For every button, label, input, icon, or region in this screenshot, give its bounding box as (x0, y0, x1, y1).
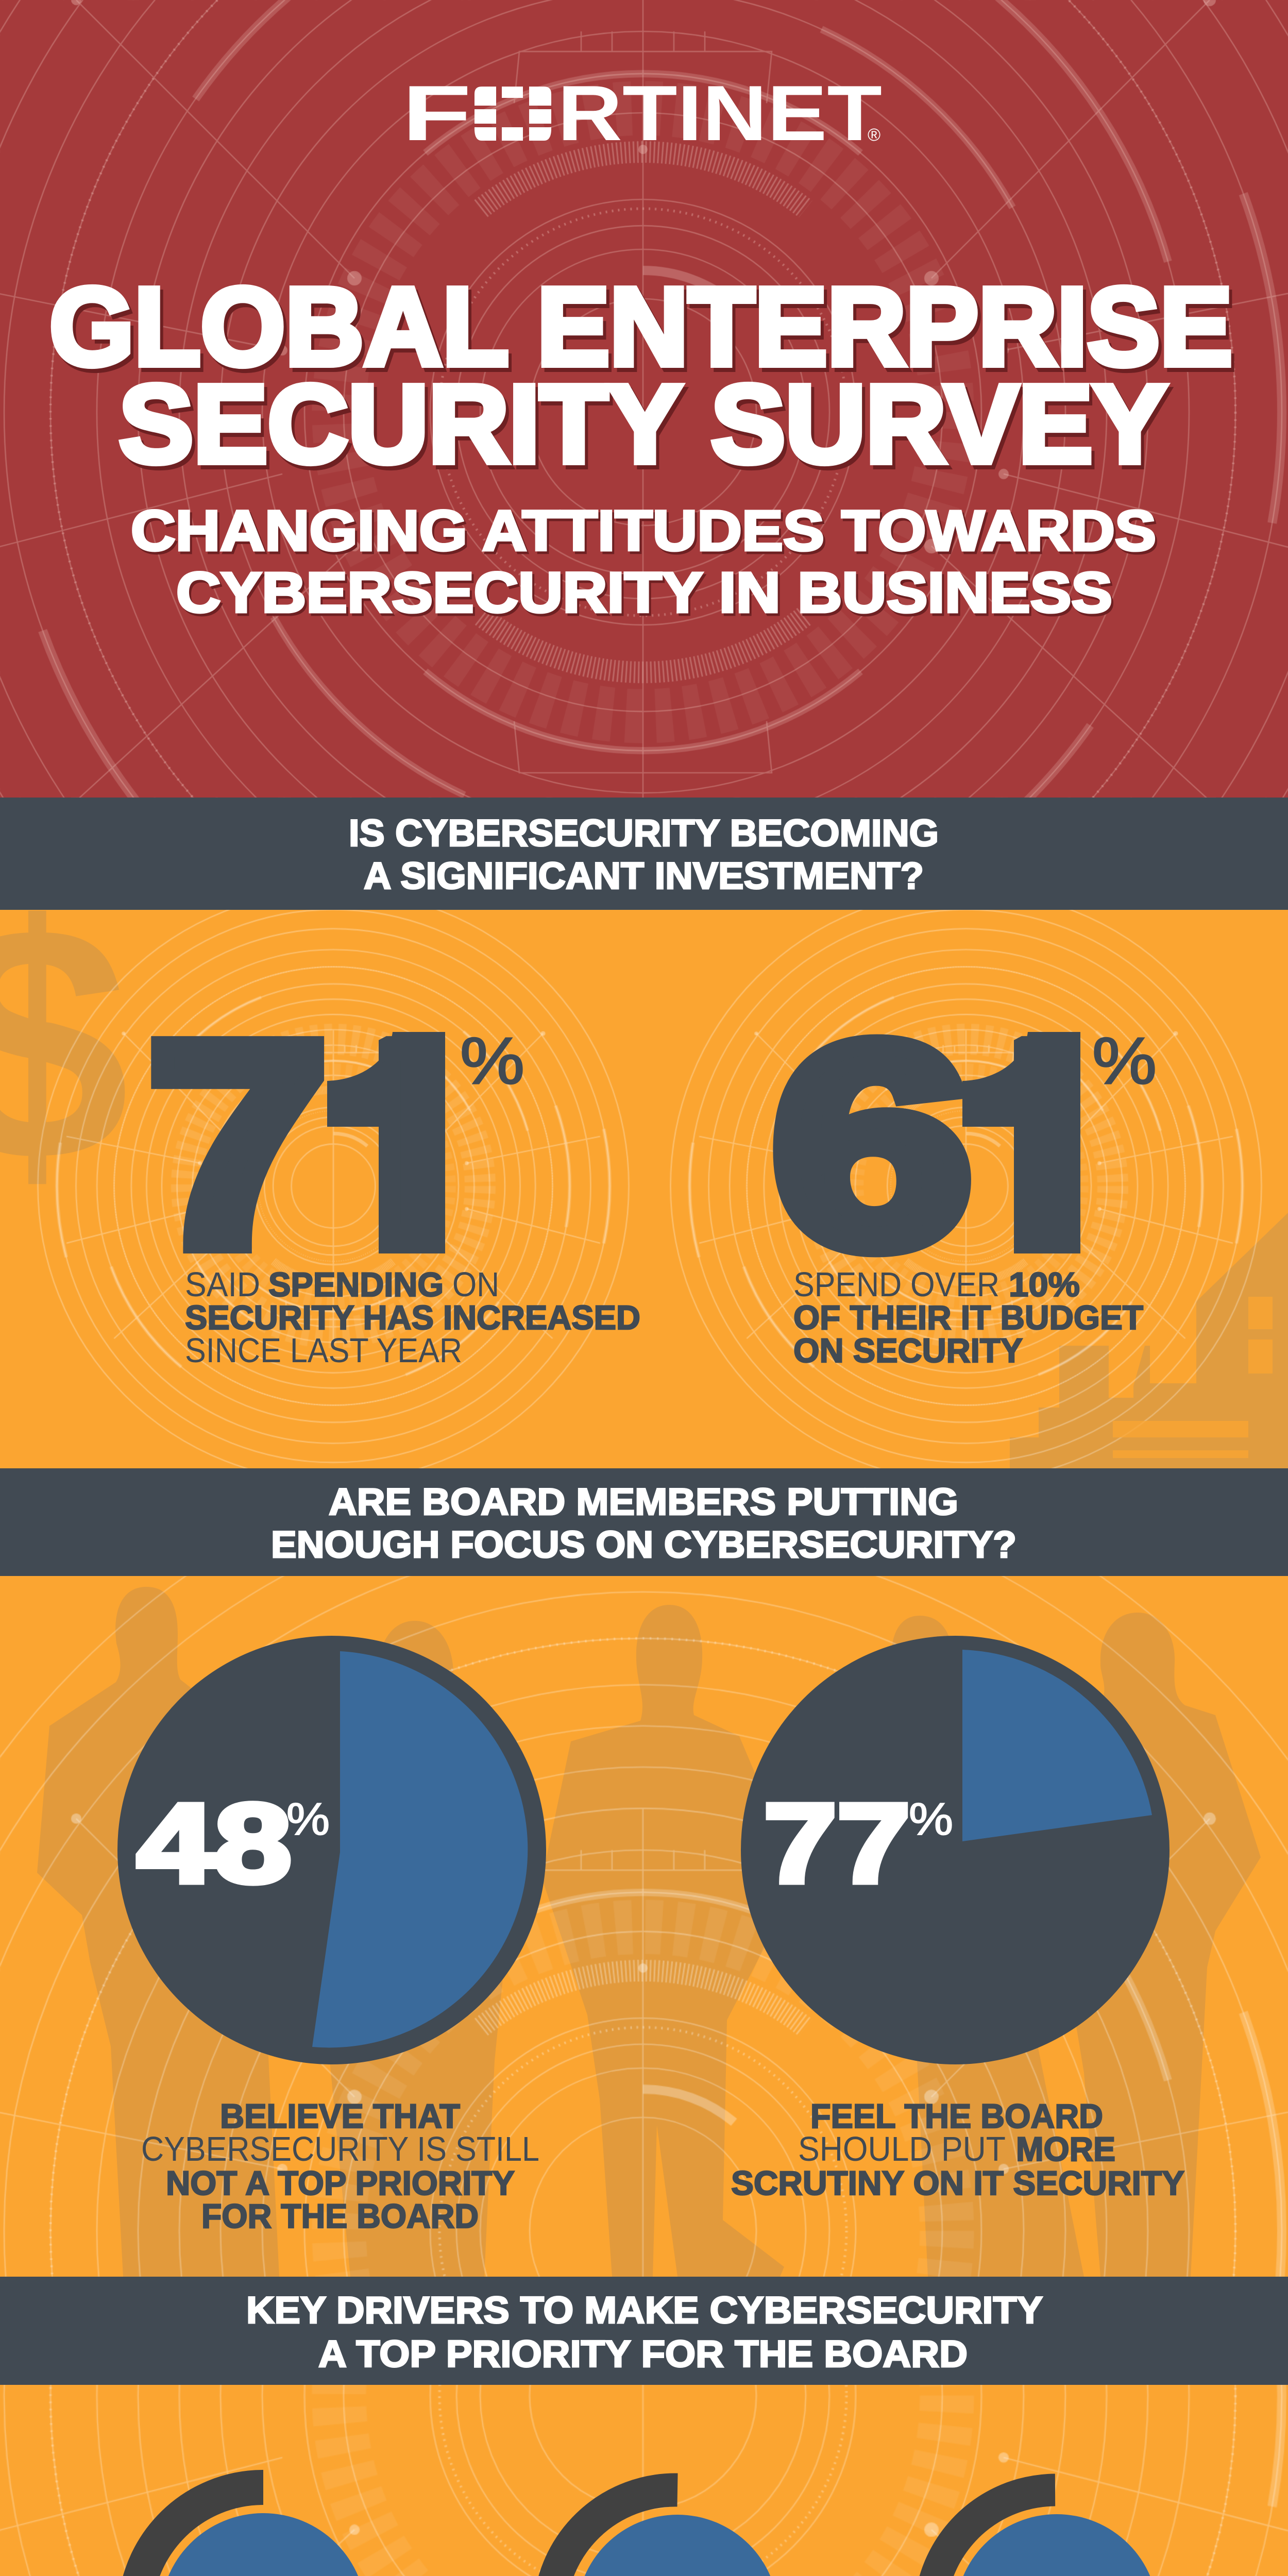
text: spending caption: ON (452, 1265, 499, 1304)
subtitle: CHANGING ATTITUDES TOWARDS (133, 502, 1158, 565)
heading band: key drivers: KEY DRIVERS TO MAKE CYBERSECURITY (246, 2290, 1043, 2331)
heading band: key drivers: A TOP PRIORITY FOR THE BOARD (318, 2333, 968, 2375)
stat: 71 percent: 1 (304, 985, 502, 1304)
heading band: investment: IS CYBERSECURITY BECOMING (349, 812, 939, 854)
text: budget caption: 10% (1009, 1265, 1080, 1303)
heading band: investment: A SIGNIFICANT INVESTMENT? (364, 855, 924, 897)
logo: Fortinet: RTINET (557, 70, 882, 157)
logo: Fortinet: ® (868, 125, 880, 145)
stat: 71 percent (151, 1032, 523, 1253)
pie chart: 77 percent (741, 1636, 1170, 2064)
logo: Fortinet (402, 70, 882, 157)
text: spending caption: SECURITY HAS INCREASED (185, 1298, 640, 1336)
pie chart: 48 percent (117, 1636, 546, 2064)
logo: Fortinet: F (402, 70, 471, 157)
heading band: board (0, 1468, 1288, 1576)
subtitle (131, 499, 1158, 627)
heading band: board: ARE BOARD MEMBERS PUTTING (329, 1481, 958, 1523)
pattern: hud rings (0, 2385, 1288, 2576)
ring chart: 77 percent cloud migration (135, 2487, 392, 2576)
pattern: hud rings (0, 910, 1288, 1468)
stat: 61 percent: 6 (773, 986, 971, 1305)
text: priority caption: CYBERSECURITY IS STILL (141, 2130, 539, 2168)
pie chart: 77 percent: 77 (764, 1781, 910, 1906)
subtitle: CHANGING ATTITUDES TOWARDS (131, 499, 1156, 563)
text: budget caption: OF THEIR IT BUDGET (793, 1298, 1143, 1336)
text: scrutiny caption: MORE (1016, 2130, 1115, 2168)
text: spending caption: SPENDING (268, 1265, 444, 1303)
pattern: hud rings (0, 1576, 1288, 2277)
text: scrutiny caption: FEEL THE BOARD (810, 2097, 1103, 2135)
text: spending caption: SINCE LAST YEAR (185, 1331, 462, 1370)
ring chart: 49 percent headlines (550, 2490, 778, 2576)
text: budget caption: ON SECURITY (793, 1331, 1023, 1369)
heading band: board: ENOUGH FOCUS ON CYBERSECURITY? (271, 1524, 1016, 1566)
title: GLOBAL ENTERPRISE (49, 264, 1232, 388)
stat: 61 percent (773, 1032, 1155, 1257)
panel: section 3 key drivers (0, 2385, 1288, 2576)
title (49, 264, 1235, 490)
text: spending caption: SAID (185, 1265, 260, 1304)
stat: 71 percent: % (460, 1024, 524, 1098)
pie chart: 48 percent: % (286, 1793, 330, 1844)
text: budget caption: SPEND OVER (793, 1265, 999, 1304)
ring chart: 35 percent regulations (930, 2490, 1158, 2576)
text: priority caption: FOR THE BOARD (201, 2197, 479, 2235)
text: priority caption: BELIEVE THAT (220, 2097, 460, 2135)
panel: red header (0, 0, 1288, 798)
pie chart: 77 percent: % (909, 1793, 953, 1844)
stat: 61 percent: % (1092, 1024, 1157, 1098)
stat: 71 percent: 7 (149, 985, 327, 1304)
text: priority caption (141, 2097, 539, 2235)
text: scrutiny caption: SHOULD PUT (798, 2130, 1006, 2168)
panel: section 2 board members (0, 1576, 1288, 2277)
panel: section 1 investment (0, 856, 1288, 1468)
title: GLOBAL ENTERPRISE (53, 268, 1235, 393)
title: SECURITY SURVEY (119, 362, 1167, 486)
stat: 61 percent: 1 (940, 985, 1138, 1304)
silhouettes: board members (37, 1587, 1261, 2277)
icon: buildings (1010, 1213, 1288, 1468)
title: SECURITY SURVEY (122, 366, 1170, 490)
text: scrutiny caption (731, 2097, 1184, 2202)
text: priority caption: NOT A TOP PRIORITY (166, 2164, 515, 2202)
heading band: investment (0, 798, 1288, 910)
text: spending caption (185, 1265, 640, 1370)
heading band: key drivers (0, 2277, 1288, 2385)
pie chart: 48 percent: 48 (137, 1781, 292, 1906)
subtitle: CYBERSECURITY IN BUSINESS (178, 564, 1114, 627)
subtitle: CYBERSECURITY IN BUSINESS (176, 561, 1112, 624)
text: budget caption (793, 1265, 1143, 1369)
text: scrutiny caption: SCRUTINY ON IT SECURITY (731, 2164, 1184, 2202)
